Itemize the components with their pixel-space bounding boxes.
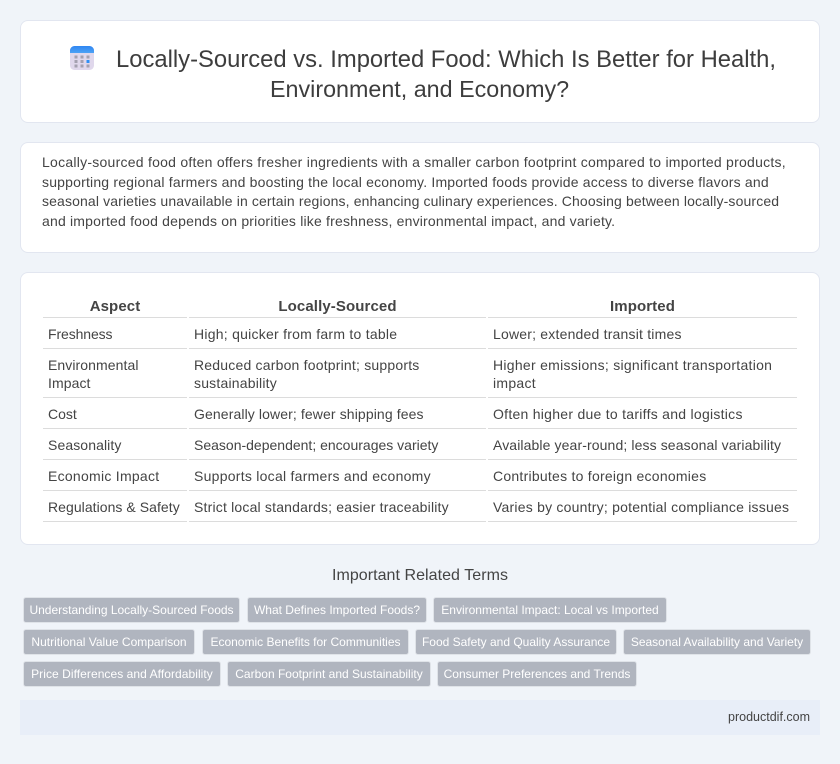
comparison table: Economic Impact [48, 468, 159, 484]
intro paragraph: and imported food depends on priorities like freshness, environmental impact, and variety. [42, 212, 615, 228]
comparison table: Regulations & Safety [48, 499, 180, 515]
comparison table [43, 298, 797, 522]
comparison table: Environmental [48, 357, 139, 373]
comparison table: Impact [48, 375, 90, 391]
table header: Imported [610, 298, 675, 315]
comparison table: Often higher due to tariffs and logistics [493, 406, 743, 422]
comparison table: Strict local standards; easier traceability [194, 499, 449, 515]
table header: Locally-Sourced [278, 298, 397, 315]
title: Locally-Sourced vs. Imported Food: Which Is Better for Health, [116, 46, 776, 73]
comparison table: Contributes to foreign economies [493, 468, 706, 484]
comparison table: Season-dependent; encourages variety [194, 437, 438, 453]
comparison table panel [20, 272, 820, 545]
related terms heading: Important Related Terms [332, 567, 508, 584]
table header: Aspect [90, 298, 140, 315]
footer bar [20, 700, 820, 735]
related terms tags: Food Safety and Quality Assurance [422, 635, 610, 649]
intro paragraph [42, 154, 786, 229]
title: Environment, and Economy? [270, 76, 569, 102]
comparison table: Higher emissions; significant transportation [493, 357, 772, 373]
icon: calendar [70, 46, 94, 70]
related terms tags: Price Differences and Affordability [31, 667, 213, 681]
comparison table: Generally lower; fewer shipping fees [194, 406, 424, 422]
related terms tags: Understanding Locally-Sourced Foods [29, 603, 234, 617]
comparison table: Freshness [48, 326, 112, 342]
comparison table: Reduced carbon footprint; supports [194, 357, 420, 373]
comparison table: Seasonality [48, 437, 121, 453]
comparison table: Lower; extended transit times [493, 326, 682, 342]
title [116, 46, 776, 102]
footer source: productdif.com [728, 710, 810, 724]
related terms tags: Nutritional Value Comparison [31, 635, 187, 649]
related terms tags [23, 597, 811, 687]
related terms tags: Carbon Footprint and Sustainability [235, 667, 423, 681]
related terms tags: Environmental Impact: Local vs Imported [441, 603, 659, 617]
title panel [20, 20, 820, 123]
comparison table: impact [493, 375, 536, 391]
related terms tags: Economic Benefits for Communities [210, 635, 401, 649]
comparison table: Cost [48, 406, 77, 422]
comparison table: Available year-round; less seasonal variability [493, 437, 781, 453]
comparison table: High; quicker from farm to table [194, 326, 397, 342]
table header [90, 298, 675, 315]
intro paragraph: supporting regional farmers and boosting the local economy. Imported foods provide access to diverse flavors and [42, 174, 769, 190]
comparison table: sustainability [194, 375, 277, 391]
comparison table: Varies by country; potential compliance issues [493, 499, 789, 515]
related terms tags: What Defines Imported Foods? [254, 603, 420, 617]
intro paragraph: Locally-sourced food often offers fresher ingredients with a smaller carbon footprint compared to imported products, [42, 154, 786, 170]
comparison table: Supports local farmers and economy [194, 468, 431, 484]
intro paragraph panel [20, 142, 820, 253]
intro paragraph: seasonal varieties unavailable in certain regions, enhancing culinary experiences. Choosing between locally-sourced [42, 193, 779, 209]
related terms tags: Seasonal Availability and Variety [631, 635, 803, 649]
related terms tags: Consumer Preferences and Trends [444, 667, 630, 681]
